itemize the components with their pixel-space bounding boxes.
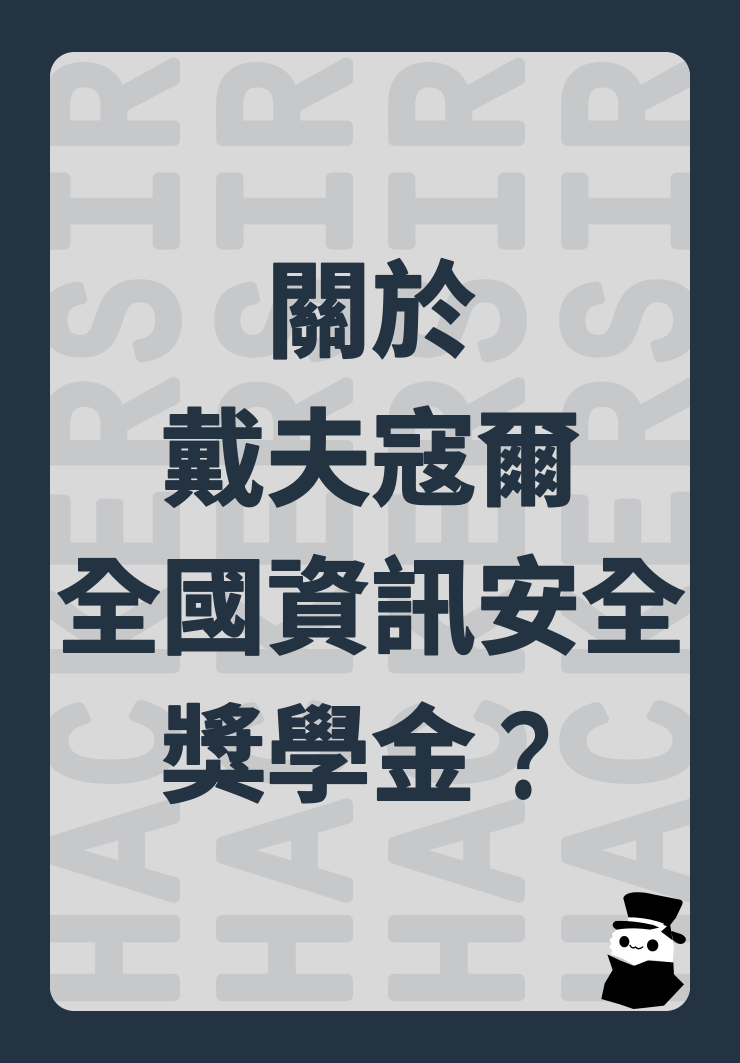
background watermark: HACKERSIR columns: R	[190, 379, 403, 472]
title: ？	[478, 695, 571, 824]
background watermark: HACKERSIR columns: R	[362, 59, 575, 153]
background watermark: HACKERSIR columns: E	[192, 489, 404, 571]
background watermark: HACKERSIR columns: I	[362, 162, 575, 260]
background watermark: HACKERSIR columns: R	[17, 59, 230, 153]
mascot ear	[661, 924, 673, 940]
background watermark: HACKERSIR columns: H	[362, 907, 575, 1009]
background watermark: HACKERSIR columns: H	[17, 907, 230, 1009]
title	[56, 255, 686, 824]
background watermark: HACKERSIR columns: C	[362, 699, 575, 787]
mascot cloak	[601, 954, 684, 1009]
title: 獎學金	[161, 699, 476, 816]
panel: light grey card	[50, 52, 690, 1011]
mascot mouth	[630, 945, 643, 949]
mascot hat	[623, 892, 683, 927]
title: 戴夫寇爾	[161, 403, 581, 520]
background watermark: HACKERSIR columns: E	[364, 489, 576, 571]
mascot face	[609, 923, 674, 966]
title: 全國資訊安全	[56, 551, 686, 668]
background watermark: HACKERSIR columns: R	[190, 59, 403, 153]
title: 關於	[266, 255, 476, 372]
background watermark: HACKERSIR columns: R	[362, 379, 575, 472]
background watermark: HACKERSIR columns: E	[19, 489, 231, 571]
background watermark: HACKERSIR columns: I	[190, 162, 403, 260]
background watermark: HACKERSIR columns: C	[190, 699, 403, 787]
mascot eyes	[619, 936, 629, 947]
background watermark: HACKERSIR columns: H	[190, 907, 403, 1009]
background watermark: HACKERSIR columns: K	[18, 590, 231, 680]
background watermark: HACKERSIR columns: K	[363, 590, 576, 680]
background watermark: HACKERSIR columns: C	[17, 699, 230, 787]
background watermark: HACKERSIR columns: S	[191, 277, 404, 363]
background watermark: HACKERSIR columns: K	[191, 590, 404, 680]
background watermark: HACKERSIR columns: A	[190, 803, 403, 897]
background watermark: HACKERSIR columns	[50, 58, 690, 1009]
background watermark: HACKERSIR columns: S	[363, 277, 576, 363]
background watermark: HACKERSIR columns: I	[17, 162, 230, 260]
background watermark: HACKERSIR columns: R	[17, 379, 230, 472]
icon: cat mascot with top hat	[601, 892, 686, 1009]
background watermark: HACKERSIR columns: A	[362, 803, 575, 897]
infographic canvas	[50, 52, 690, 1011]
mascot hat brim right	[669, 931, 686, 944]
background watermark: HACKERSIR columns: S	[18, 277, 231, 363]
mascot hat band	[628, 917, 664, 928]
mascot hat brim left	[613, 921, 659, 930]
background watermark: HACKERSIR columns: A	[17, 803, 230, 897]
